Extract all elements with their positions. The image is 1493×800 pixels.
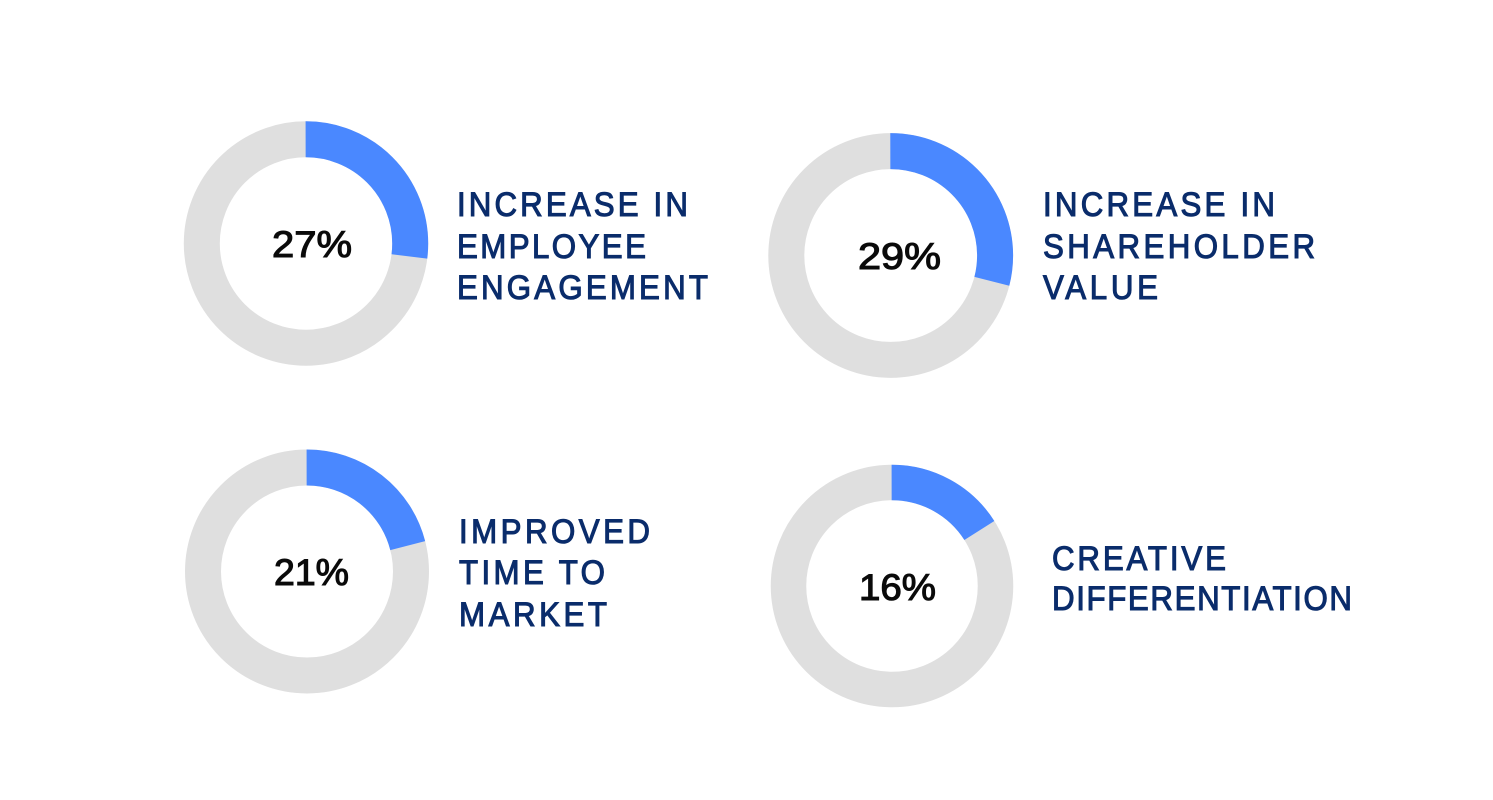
panel: employee engagement <box>202 139 708 348</box>
label: increase in shareholder value: SHAREHOLDER <box>1043 227 1315 265</box>
value: 29%: 29% <box>858 236 941 277</box>
donut chart: 21% <box>203 468 411 676</box>
label: improved time to market: MARKET <box>459 595 607 633</box>
label: increase in shareholder value: VALUE <box>1043 268 1158 306</box>
value: 27%: 27% <box>272 224 352 265</box>
label: creative differentiation <box>1052 539 1352 617</box>
panel: time to market <box>203 468 650 676</box>
panel: creative differentiation <box>788 482 1352 690</box>
label: increase in shareholder value: INCREASE IN <box>1043 185 1275 223</box>
label: improved time to market: IMPROVED <box>459 512 650 550</box>
panel: shareholder value <box>786 151 1315 360</box>
label: increase in employee engagement: INCREASE IN <box>457 185 688 223</box>
donut chart: 29% <box>786 151 995 360</box>
label: increase in employee engagement: ENGAGEMENT <box>457 268 708 306</box>
label: creative differentiation: CREATIVE <box>1052 539 1226 577</box>
donut chart: 27% <box>202 139 410 348</box>
label: improved time to market: TIME TO <box>459 553 605 591</box>
label: increase in employee engagement: EMPLOYEE <box>457 227 646 265</box>
label: creative differentiation: DIFFERENTIATION <box>1052 579 1352 617</box>
label: increase in shareholder value <box>1043 185 1315 306</box>
label: increase in employee engagement <box>457 185 708 306</box>
value: 21%: 21% <box>274 552 349 593</box>
value: 16%: 16% <box>859 567 936 608</box>
label: improved time to market <box>459 512 650 633</box>
donut chart: 16% <box>788 482 996 690</box>
